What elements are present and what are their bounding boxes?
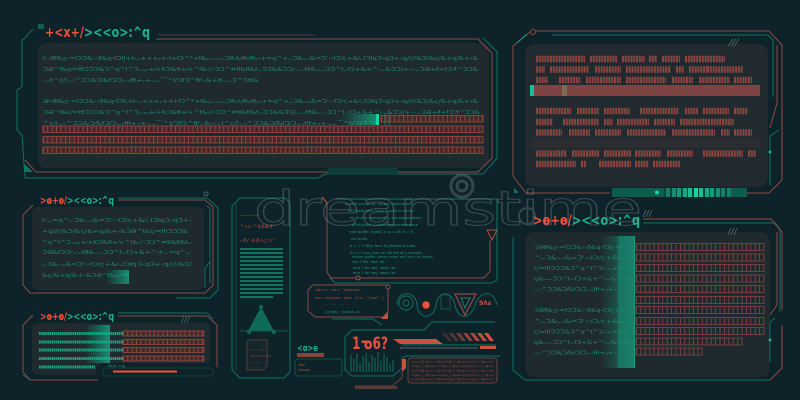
panel: small code box [308, 285, 390, 325]
text box: +*/|=:;~#<>=+-*/|=:;~#>=<+*/|=><-:;~#=> [411, 364, 494, 368]
text block: second paragraph [43, 99, 481, 127]
text block: second paragraph: ^ς⁄/⌣‹^ϽϽ&Ͻ⁄&ƚϽ⁄Ͻ⌣ᵧƚƚƚ+ᵧ+⌣⌣⁀^ƚ/ϽƚϽ^ƚƚ⁄⌣&‹‹⌣ƚ^ς⁄/⌣‹^ϽϽ&Ͻ⁄&ƚϽ⁄Ͻ⌣ᵧƚƚƚ+ᵧ+⌣⌣⁀^ƚ/ϽƚϽ^ƚƚ [43, 120, 379, 127]
text block: ς⁄=ƚƚƚϽϽϽ&Ͻ^q^ƚ^Ͻ⌣ᵧᵧ+⁄+KϽ [534, 266, 634, 272]
text block: q&⌣⌣ϽϽ^ƚ⌣ƚϽ+&+^‹⌣&ϽϽ/+ [534, 276, 634, 282]
icon: spiral [451, 175, 473, 197]
small labels [240, 214, 275, 244]
text block: second paragraph: Ə⁄‹ƌƚ&ϩ‹=ƚϽϽ&‹‹ϑ&q‹ƚϽƚ|+ƚ‹⌣+++ᵧ+‹ƚ+ƚϽ^*+ƚ&ᵧ⌣⌣ᵧ⌣Ͻƚƚᵧƚᵧƚƚƚᵧƚƚƚᵧ‹+=q^+⌣Ͻ&⌣ᵧ&=Ͻ'‹‹ƚϽ/ς+&⁄⌣ƚϽƚqϽ‹qϽ+‹q////&Ͻ/&ς/&+q/&+‹& [43, 99, 479, 105]
panel: small code box: import core "dgsense" [315, 288, 361, 293]
small red box: —— —— [250, 347, 266, 351]
small labels: ‹ƌ/·ɓƌ/ς/ɔ" [240, 238, 275, 244]
code text: print(data) // scanning started done [352, 223, 419, 227]
text block: ϽƏƚƚ&ϩ‹=ƚϽϽ&‹‹ϑ&q‹ƚϽƚ|+ƚ‹⌣+ [534, 245, 634, 251]
text block: ς⁄=ƚƚƚϽϽϽ&Ͻ^q^ƚ^Ͻ⌣ᵧᵧ+⁄+KϽ [534, 330, 634, 336]
text block: +q////&Ͻ/&ς/&+q/&+‹&ϽƏ^ƚ&ς⁄=ƚƚƚϽϽϽ& [42, 229, 189, 235]
code text: def load(path, key): if path in cache [348, 209, 415, 213]
text block: ⌣‹^ϽϽ&Ͻ⁄&ƚϽ⁄Ͻ⌣ᵧƚƚƚ+ᵧ+⌣⌣⁀^ [534, 286, 634, 293]
heading: >ɵ+ɵ/><<o>:^q [40, 194, 114, 207]
text block: ƚ‹⌣=q^⌣Ͻ&⌣ᵧ&=Ͻ'‹‹ƚϽ/ς+&⁄⌣ƚϽƚqϽ‹qϽ+‹ [42, 218, 192, 224]
text block: ϽƏƚƚ&ϩ‹=ƚϽϽ&‹‹ϑ&q‹ƚϽƚ|+ƚ‹⌣+ [534, 308, 634, 314]
text block: ^q^ƚ^Ͻ⌣ᵧᵧ+⁄+KϽ&ƚƚ+⁄+^ƚ&‹/‹ϽϽ^≠ƚƚ&ƚƚ&ƚ⌣ [42, 240, 193, 246]
panel: small code box: var runtime: bool this "load" { [315, 296, 384, 301]
code text: end 1 for key; next; ret [353, 266, 396, 270]
text block: ⌣‹^ϽϽ&Ͻ⁄&ƚϽ⁄Ͻ⌣ᵧƚƚƚ+ᵧ+⌣⌣⁀^ [534, 350, 634, 356]
text block: second paragraph: ϽƏ^ƚ&ς⁄=ƚƚƚϽϽϽ&Ͻ^q^ƚ^Ͻ⌣ᵧᵧ+⁄+KϽ&ƚƚ+⁄+^ƚ&‹/‹ϽϽ^≠ƚƚ&ƚƚ&ƚ⌣ϽϽ&&ϽϽ/⌣⌣ƚϑ&⌣⌣ϽϽ^ƚ⌣ƚϽ+&+^‹⌣&ϽϽ/+‹‹⌣ϽƏ+⁄ƚ+ƚϽ'⁄ƚ^ϽϽ& [43, 110, 481, 116]
heading: >ɵ+ɵ/><<o>:^q [40, 310, 114, 323]
redacted text bars [536, 59, 756, 164]
text block: ϽƏ&ƚϽϽ/⌣⌣ƚϑ&⌣⌣ϽϽ^ƚ⌣ƚϽ+&+^‹ƚ‹⌣=q^⌣ [42, 250, 191, 256]
text block: first paragraph: ƚ‹‹ƌƚ&ϩ‹=ƚϽϽ&‹‹ϑ&q‹ƚϽƚ|+ƚ‹⌣+++ᵧ+‹ƚ+ƚϽ^*+ƚ&ᵧ⌣⌣ᵧ⌣Ͻƚƚᵧƚᵧƚƚƚᵧƚƚƚᵧ‹+=q^+⌣Ͻ&⌣ᵧ&=Ͻ'‹‹ƚϽ/ς+&⁄⌣ƚϽƚqϽ‹qϽ+‹q////&Ͻ/&ς/&+q/&+‹& [43, 56, 479, 62]
watermark [254, 175, 642, 237]
scan glow [600, 236, 634, 368]
text box: +*/|=:;~#<>=+-*/|=:;~#>=<+*/|=><-:;~#=> [411, 374, 494, 378]
lines list [240, 249, 283, 297]
box rows [636, 244, 764, 355]
slider pill [96, 363, 218, 383]
panel: code label [295, 344, 342, 376]
text block: q&⌣⌣ϽϽ^ƚ⌣ƚϽ+&+^‹⌣&ϽϽ/+ [534, 340, 634, 346]
code text: a = 1 + this; func it_decode it code [350, 244, 416, 248]
green rows [39, 334, 123, 367]
panel: redacted document [513, 30, 782, 197]
small red box [247, 340, 271, 370]
stripe bar [393, 339, 443, 344]
text block: ⌣Ͻ&⌣ᵧ&=Ͻ'‹‹ƚϽ/ς+&⁄⌣ƚϽƚqϽ‹qϽ+‹q////&Ͻ/ [42, 262, 192, 268]
heading: >ɵ+ɵ/><<o>:^q [533, 213, 640, 229]
panel: code snippet [322, 197, 497, 283]
highlight bar [530, 85, 760, 96]
heading: main title: +<x+/><<o>:^q [45, 25, 150, 41]
text block: first paragraph: ⌣‹ƚ^ς⁄/⌣‹^ϽϽ&Ͻ⁄&ƚϽ⁄Ͻ⌣ᵧƚƚƚ+ᵧ+⌣⌣⁀^ƚ/ϽƚϽ^ƚƚ⁄⌣&+ƚƚ⌣⌣Ͻ^ϽϑG [43, 77, 258, 84]
panel: code label: <o>e [297, 344, 318, 354]
text box: >=<+*/|=><-:;~#=>+*/|=:;~#<>=+-*/|=:;~#>=<+ [411, 378, 494, 382]
dotted strip [400, 347, 478, 349]
text block: first paragraph: ϽƏ^ƚ&ς⁄=ƚƚƚϽϽϽ&Ͻ^q^ƚ^Ͻ⌣ᵧᵧ+⁄+KϽ&ƚƚ+⁄+^ƚ&‹/‹ϽϽ^≠ƚƚ&ƚƚ&ƚ⌣ϽϽ&&ϽϽ/⌣⌣ƚϑ&⌣⌣ϽϽ^ƚ⌣ƚϽ+&+^‹⌣&ϽϽ/+‹‹⌣ϽƏ+⁄ƚ+ƚϽ'⁄ƚ^ϽϽ& [43, 67, 479, 73]
code text: var build [351, 237, 367, 241]
small red box: ======= [250, 354, 271, 358]
watermark: dreamstime [254, 182, 642, 237]
icon: triangle [240, 305, 287, 334]
small labels: —— —— [240, 214, 260, 219]
hazard stripes [442, 333, 494, 341]
panel: right data decoding [513, 210, 782, 380]
panel: lower-left data decoding [23, 310, 218, 383]
code text: end 1 for key; next; ret [353, 271, 396, 275]
scan glow [106, 270, 129, 284]
text box [408, 358, 497, 383]
label: 9Ʌƨ [479, 300, 492, 307]
text block: first paragraph [43, 56, 479, 84]
panel: mid-left data decoding [23, 192, 218, 298]
icon: small mark [519, 208, 535, 224]
redacted box rows [43, 116, 483, 154]
progress strip [612, 188, 747, 197]
heading: 1ᓀ6? [352, 334, 388, 354]
icon: tablet [441, 295, 450, 309]
small red box: ········· [250, 361, 260, 365]
icon: red dot [422, 301, 430, 309]
code text [345, 202, 434, 275]
text box: >=<+*/|=><-:;~#=>+*/|=:;~#<>=+-*/|=:;~#>=<+ [411, 360, 494, 364]
code text: import sys, time, socket, hashlib as h [345, 202, 414, 206]
text block [534, 245, 635, 356]
code text: for line in open(path): out.append(key) [350, 216, 422, 220]
text box: >=<+*/|=><-:;~#=>+*/|=:;~#<>=+-*/|=:;~#>=<+ [411, 369, 494, 373]
wave line [397, 294, 497, 316]
chart: spectrum [351, 352, 393, 372]
icon: inverted triangle [455, 294, 476, 315]
panel: signal readout [345, 322, 500, 389]
panel: small code box: {code} status.ok [325, 310, 361, 315]
scan glow [85, 325, 110, 363]
text block: ^⌣Ͻ&⌣ᵧ&=Ͻ'‹‹ƚϽ/ς+&⁄⌣ƚϽƚ [534, 319, 635, 325]
panel: main text decoding [17, 24, 497, 178]
red box rows [123, 331, 204, 361]
icon: warning triangle [487, 230, 497, 240]
panel: centre tall column [232, 198, 290, 378]
code text: return buffer; when; else; elif; do; for; while; [352, 255, 434, 259]
panel: small code box: — — — — — — [324, 303, 350, 307]
scan glow [340, 113, 389, 126]
slider pill: data.log [108, 364, 125, 369]
code text: if x >= sys_turn on list file of s_stream; [350, 251, 423, 255]
small labels: ^ɔɔ:^ɓɓɓƌ" [240, 224, 275, 230]
icon: target [399, 296, 413, 310]
red tab [402, 359, 406, 372]
text block [42, 218, 193, 279]
text block: ^⌣Ͻ&⌣ᵧ&=Ͻ'‹‹ƚϽ/ς+&⁄⌣ƚϽƚ [534, 256, 635, 262]
code text: var 2 file; last; ok [352, 260, 385, 264]
icons row [397, 294, 497, 316]
text block: &ς/&+q/&+‹&ϽƏ^ƚ&ς⁄=ƚ [42, 273, 129, 279]
code text: new buffer; byte[] x; a = 16; b = 0 [349, 230, 414, 234]
